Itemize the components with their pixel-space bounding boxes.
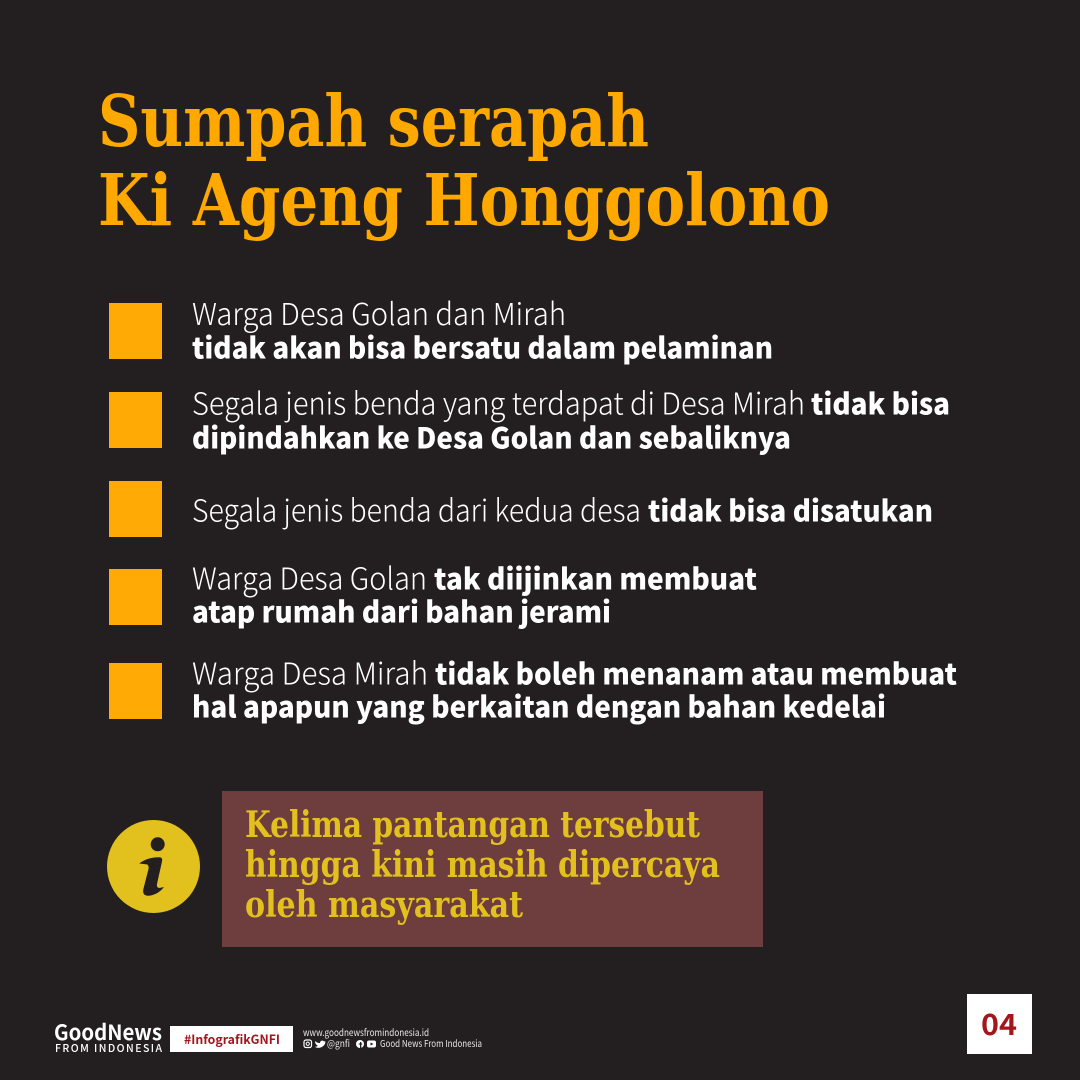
- callout: hingga kini masih dipercaya: [245, 844, 720, 886]
- logo: GoodNews from Indonesia: FROM INDONESIA: [55, 1041, 162, 1056]
- item 3: Segala jenis benda dari kedua desa: [192, 486, 641, 530]
- page number: 04: [981, 1002, 1017, 1044]
- website and social media: [303, 1025, 482, 1050]
- item 1: Warga Desa Golan dan Mirah: [192, 290, 566, 334]
- callout: oleh masyarakat: [245, 884, 523, 926]
- website and social media: @gnfi: [327, 1036, 350, 1050]
- item 5: hal apapun yang berkaitan dengan bahan kedelai: [192, 684, 886, 726]
- logo: GoodNews from Indonesia: GoodNews: [54, 1017, 162, 1047]
- title: [98, 79, 830, 242]
- hashtag label: [170, 1026, 293, 1052]
- item 4: Warga Desa Golan: [192, 554, 427, 598]
- item 2: Segala jenis benda yang terdapat di Desa Mirah: [192, 380, 805, 424]
- callout: Kelima pantangan tersebut: [245, 804, 700, 846]
- website and social media: www.goodnewsfromindonesia.id: [303, 1025, 429, 1039]
- item 1: [109, 290, 773, 368]
- item 5: Warga Desa Mirah: [192, 650, 428, 694]
- title: Ki Ageng Honggolono: [98, 158, 830, 242]
- hashtag label: #InfografikGNFI: [184, 1029, 280, 1048]
- icon: youtube: [367, 1040, 376, 1048]
- icon: twitter: [315, 1041, 326, 1048]
- icon: info circle: [107, 820, 200, 913]
- item 2: [109, 380, 950, 458]
- item 2: tidak bisa: [811, 382, 950, 424]
- website and social media: Good News From Indonesia: [380, 1036, 482, 1050]
- callout: [222, 791, 763, 947]
- list of five taboos: [109, 290, 957, 726]
- item 5: tidak boleh menanam atau membuat: [435, 652, 957, 694]
- page number: [967, 994, 1032, 1054]
- item 5: [109, 650, 957, 726]
- item 1: tidak akan bisa bersatu dalam pelaminan: [192, 326, 773, 368]
- item 2: dipindahkan ke Desa Golan dan sebaliknya: [192, 416, 791, 458]
- icon: facebook: [356, 1040, 364, 1048]
- icon: instagram: [304, 1040, 312, 1048]
- item 3: tidak bisa disatukan: [648, 488, 933, 530]
- title: Sumpah serapah: [98, 79, 649, 163]
- item 3: [109, 481, 933, 537]
- item 4: tak diijinkan membuat: [434, 556, 757, 598]
- item 4: atap rumah dari bahan jerami: [192, 590, 611, 632]
- item 4: [109, 554, 757, 632]
